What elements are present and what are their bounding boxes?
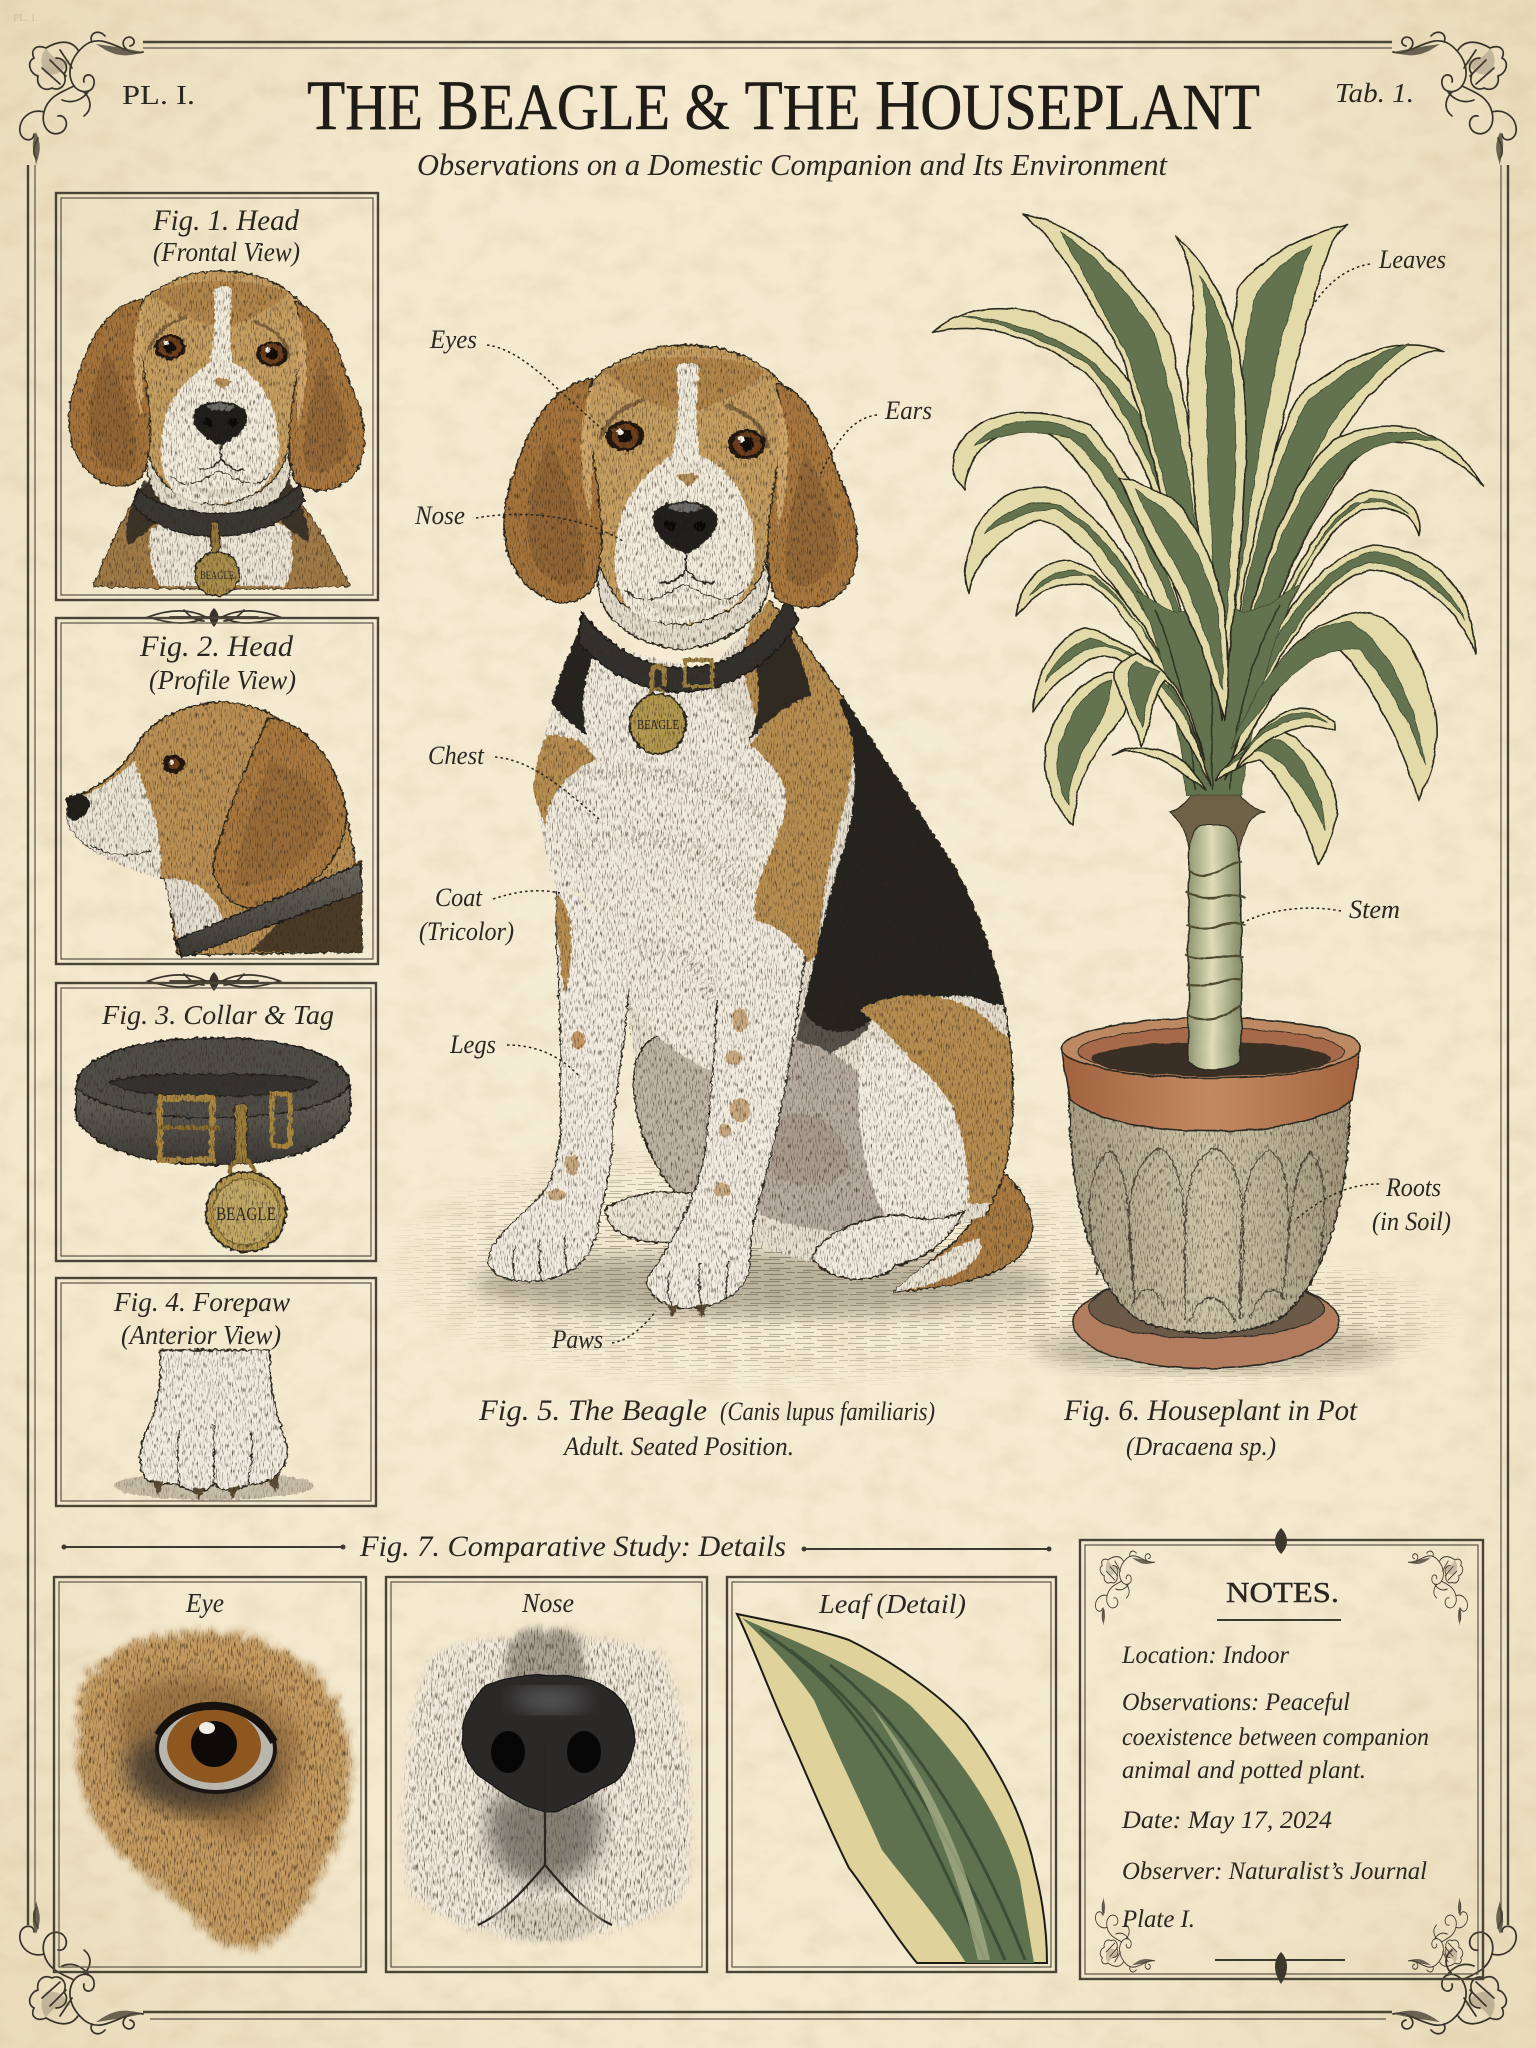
caption: Fig. 1: Fig. 1. Head [152,204,300,237]
hind foot [812,1210,965,1279]
caption: Nose: Nose [521,1588,574,1618]
label: Paws: Paws [551,1325,603,1354]
head [504,345,857,650]
front left leg [488,890,628,1282]
caption: Fig. 6: Fig. 6. Houseplant in Pot [1063,1394,1358,1427]
illustration: seated beagle [488,345,1040,1318]
panel: Fig. 3 collar and tag [56,983,376,1261]
label: Ears [820,396,932,475]
label: Legs: Legs [449,1030,496,1059]
front right leg [647,917,805,1318]
notes body: Plate I. [1121,1906,1195,1933]
plate number: PL. I. [122,80,195,110]
collar [578,596,798,702]
floor shading under dog [394,1149,1107,1388]
label: Nose [414,501,623,541]
caption: Fig. 5 [478,1394,935,1461]
pot rim [1062,1018,1360,1132]
label: Roots [1295,1173,1451,1236]
illustration: frontal head [69,271,364,596]
notes body: animal and potted plant. [1122,1757,1366,1784]
crown of dense leaves [1135,560,1300,795]
table number: Tab. 1. [1335,78,1414,108]
panel: Fig. 1 head frontal [56,193,378,600]
caption: Leaf detail: Leaf (Detail) [818,1589,966,1619]
leaves [933,214,1483,865]
label: Eyes [429,325,608,434]
chest fur strokes [560,770,770,1000]
subtitle: Observations on a Domestic Companion and Its Environment [417,147,1168,182]
illustration: profile head [66,702,362,958]
caption: Fig. 6 [1063,1394,1358,1461]
label: Roots: (in Soil) [1372,1207,1451,1236]
tan chest edge [533,735,596,825]
caption: Eye: Eye [185,1588,224,1618]
label: Stem [1240,895,1400,924]
tag text: BEAGLE [637,718,679,733]
label: Leaves: Leaves [1378,245,1446,274]
illustration: leaf [737,1614,1047,1963]
caption: Fig. 2: Fig. 2. Head [139,630,294,663]
tag text: BEAGLE [200,568,234,582]
caption: Fig. 6: (Dracaena sp.) [1126,1432,1276,1461]
subcaption: profile view: (Profile View) [149,665,296,695]
notes body: Date: May 17, 2024 [1121,1807,1332,1834]
label: Coat: Coat [435,883,483,912]
subcaption: frontal view: (Frontal View) [153,237,300,267]
tag text: BEAGLE [216,1204,276,1225]
label: Nose: Nose [414,501,465,530]
tag [630,694,686,754]
notes body [1121,1642,1429,1933]
title: THE BEAGLE & THE HOUSEPLANT [307,67,1260,145]
panel: notes [1080,1528,1483,1984]
label: Chest: Chest [428,741,485,770]
label: Eyes: Eyes [429,325,477,354]
rear leg behind front legs [605,1033,735,1243]
chest [535,640,786,1072]
floor shading under pot [980,1266,1452,1384]
heading: Fig. 7 [62,1530,1052,1563]
notes body: coexistence between companion [1122,1724,1429,1751]
illustration: collar [76,1038,350,1252]
notes body: Observations: Peaceful [1122,1689,1350,1716]
panel: leaf detail [727,1577,1056,1972]
body [627,600,1015,1262]
divider ornament [148,608,280,627]
label: Paws [551,1311,656,1354]
plate mark: PL. I. [13,12,38,24]
panel: nose detail [386,1577,707,1972]
tan shoulder [750,699,853,966]
panel: eye detail [54,1577,366,1972]
stem [1170,785,1266,1070]
coat colour patches clipped to the body outline [742,600,1014,1205]
divider ornament [148,972,280,991]
notes body: Observer: Naturalist’s Journal [1122,1858,1427,1885]
caption: Fig. 5: Fig. 5. The Beagle [478,1394,707,1427]
label: Stem: Stem [1349,895,1400,924]
tail [894,1168,1033,1292]
label: Roots: Roots [1385,1173,1441,1202]
panel: Fig. 4 forepaw [56,1278,376,1506]
saucer [1073,1275,1339,1369]
illustration: houseplant in pot [933,214,1483,1369]
heading: Fig. 7: Fig. 7. Comparative Study: Details [359,1530,786,1563]
label: Coat [419,883,560,946]
pot body [1069,1080,1350,1333]
caption: Fig. 5: (Canis lupus familiaris) [720,1397,935,1426]
caption: Fig. 3: Fig. 3. Collar & Tag [101,1000,334,1030]
label: Ears: Ears [884,396,932,425]
subcaption: anterior view: (Anterior View) [121,1320,281,1350]
dark neck patches [552,618,812,742]
illustration: nose [404,1629,690,1941]
label: Leaves [1310,245,1446,310]
notes heading: NOTES. [1226,1578,1339,1609]
label: Legs [449,1030,580,1077]
illustration: eye [77,1632,350,1948]
label: Chest [428,741,599,819]
notes body: Location: Indoor [1121,1642,1289,1669]
caption: Fig. 4: Fig. 4. Forepaw [113,1287,290,1317]
illustration: paw [114,1350,314,1500]
label: Coat: (Tricolor) [419,917,514,946]
caption: Fig. 5: Adult. Seated Position. [562,1432,794,1461]
panel: Fig. 2 head profile [56,618,378,964]
